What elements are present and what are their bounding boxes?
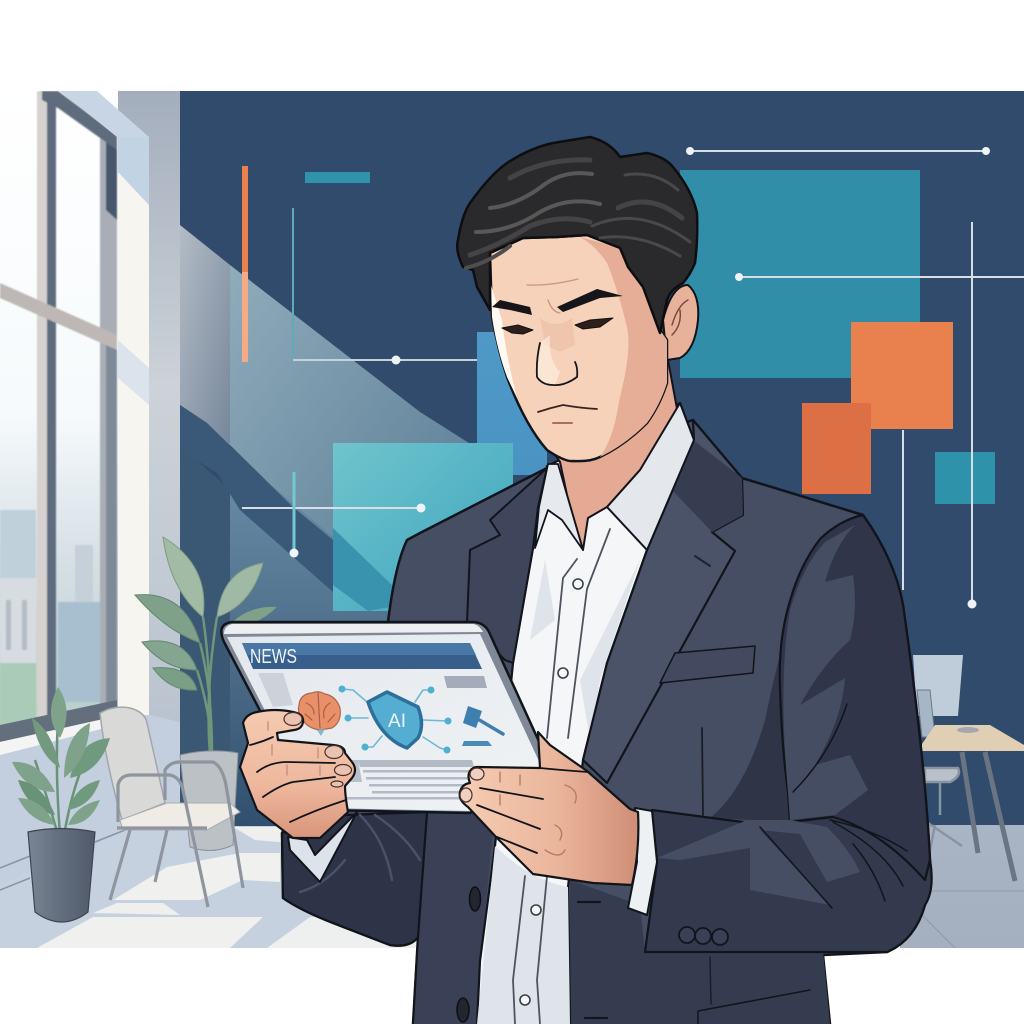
right hand nails — [460, 768, 484, 802]
tablet bezel — [224, 624, 483, 634]
side wall — [115, 91, 180, 826]
slits — [578, 902, 607, 1018]
right hand — [460, 732, 638, 885]
lower lip — [553, 422, 572, 424]
hair strands — [466, 160, 690, 268]
image placeholder — [258, 673, 293, 707]
forehead crease — [527, 279, 578, 313]
shirt buttons — [520, 579, 583, 1005]
news label: NEWS — [250, 646, 297, 668]
jacket — [282, 420, 930, 1024]
nose shading — [537, 335, 560, 385]
forearm light patch — [657, 820, 860, 905]
face highlight — [491, 285, 517, 398]
decorative circuit lines — [242, 147, 1024, 608]
lower left wall — [0, 715, 180, 885]
neck — [545, 360, 680, 550]
breast pocket — [660, 646, 755, 683]
sun patch: right — [267, 917, 420, 948]
person — [221, 137, 932, 1024]
right lapel — [583, 420, 743, 783]
mouth — [538, 405, 597, 412]
page margin: top — [0, 0, 1024, 91]
right eye — [575, 318, 613, 329]
caption block behind fingers — [338, 760, 362, 782]
left eyebrow — [492, 300, 532, 315]
dart line — [702, 728, 703, 815]
ear — [663, 285, 698, 360]
baseboard lines — [0, 826, 135, 890]
column light stripe — [118, 340, 149, 405]
back wall — [180, 91, 1024, 826]
sleeve light patch — [783, 525, 868, 820]
light beam on wall, blue part — [230, 265, 480, 610]
right floor tile lines — [922, 891, 1024, 948]
monitor — [913, 655, 963, 716]
shirt — [477, 403, 694, 1024]
darker orange square — [802, 403, 871, 494]
left front panel lower — [413, 812, 495, 1024]
orange bar — [242, 166, 248, 272]
chair — [100, 707, 243, 907]
blue rectangle — [477, 332, 547, 475]
small teal square — [935, 452, 995, 504]
small grey tag — [444, 676, 487, 688]
nose — [537, 343, 577, 385]
jacket centre edge — [413, 812, 427, 1024]
dark corner below wall strip — [180, 445, 230, 826]
desk legs — [962, 752, 1015, 881]
eye socket shade — [540, 318, 575, 352]
window frame bottom and sill — [0, 700, 117, 742]
lower wall lit panel — [230, 450, 395, 826]
small teal bar — [305, 172, 370, 183]
lower seam — [710, 957, 711, 1004]
light beam on wall, pale strip — [180, 225, 230, 455]
knuckle creases — [268, 722, 320, 775]
icon: AI shield: AI — [388, 711, 406, 732]
stripe across teal rectangle — [333, 528, 395, 611]
icon: gavel — [462, 706, 503, 746]
icon: AI shield — [368, 692, 422, 748]
right sleeve — [645, 515, 932, 952]
window — [0, 91, 149, 755]
small tablet on desk — [917, 690, 935, 737]
shirt folds — [477, 560, 640, 1024]
sun patch: big — [37, 917, 263, 948]
skyline — [0, 510, 101, 735]
right hand finger lines — [477, 768, 588, 853]
page margin: bottom — [0, 948, 1024, 1024]
head — [457, 137, 698, 461]
icon: brain — [298, 692, 340, 736]
face — [490, 235, 667, 461]
left hand — [240, 710, 355, 838]
plant: left — [12, 687, 110, 922]
news header highlight — [242, 643, 476, 655]
tablet body — [221, 622, 552, 813]
right eyebrow — [557, 289, 623, 312]
right floor — [900, 825, 1024, 948]
dark light stripe — [180, 405, 333, 592]
column shadow — [118, 137, 149, 205]
sun patch: upper — [113, 853, 280, 900]
sun patch: middle — [93, 903, 180, 915]
sun patch: top — [233, 827, 290, 843]
left shirt cuff — [288, 812, 357, 882]
article text lines — [312, 760, 474, 800]
left sleeve — [282, 812, 427, 946]
desk top — [922, 725, 1024, 751]
window glass — [0, 91, 118, 741]
left lapel — [467, 468, 547, 663]
window reveal — [60, 91, 149, 137]
upper right lapel shade — [672, 440, 743, 532]
light teal rectangle — [333, 443, 513, 611]
sleeve fold lines — [300, 815, 420, 892]
hair — [457, 137, 697, 333]
lapel buttonhole — [695, 556, 710, 566]
left collar — [535, 464, 583, 550]
office chair — [925, 768, 962, 850]
orange square — [851, 322, 953, 429]
right hand knuckles — [500, 772, 576, 855]
left eye — [502, 325, 533, 334]
connector nodes — [338, 686, 452, 754]
jacket button — [470, 887, 480, 911]
shirt placket — [513, 529, 610, 1024]
shadow by sleeve seam — [710, 620, 790, 822]
network connectors — [342, 689, 448, 750]
news header bar — [242, 643, 482, 669]
white wall column — [118, 145, 149, 715]
sleeve buttons — [679, 927, 728, 945]
floor — [0, 825, 420, 948]
window mullions — [0, 91, 117, 736]
orange bar lit part — [242, 272, 248, 362]
upper sleeve — [780, 515, 930, 880]
forearm — [645, 810, 932, 952]
left hand nails — [284, 712, 352, 787]
right collar — [607, 403, 694, 550]
lower jacket button — [457, 998, 469, 1022]
lower body shading — [570, 880, 830, 1024]
desk with monitor — [913, 655, 1024, 881]
sleeve fold lines — [760, 704, 907, 908]
large teal rectangle — [680, 170, 920, 378]
plant: centre — [135, 537, 277, 851]
left hand finger lines — [250, 737, 346, 822]
face shade — [580, 237, 667, 457]
right shirt cuff — [628, 808, 657, 915]
tablet screen — [227, 634, 544, 811]
tablet — [221, 622, 552, 813]
inner ear — [672, 300, 688, 335]
lower pocket — [698, 990, 810, 1024]
